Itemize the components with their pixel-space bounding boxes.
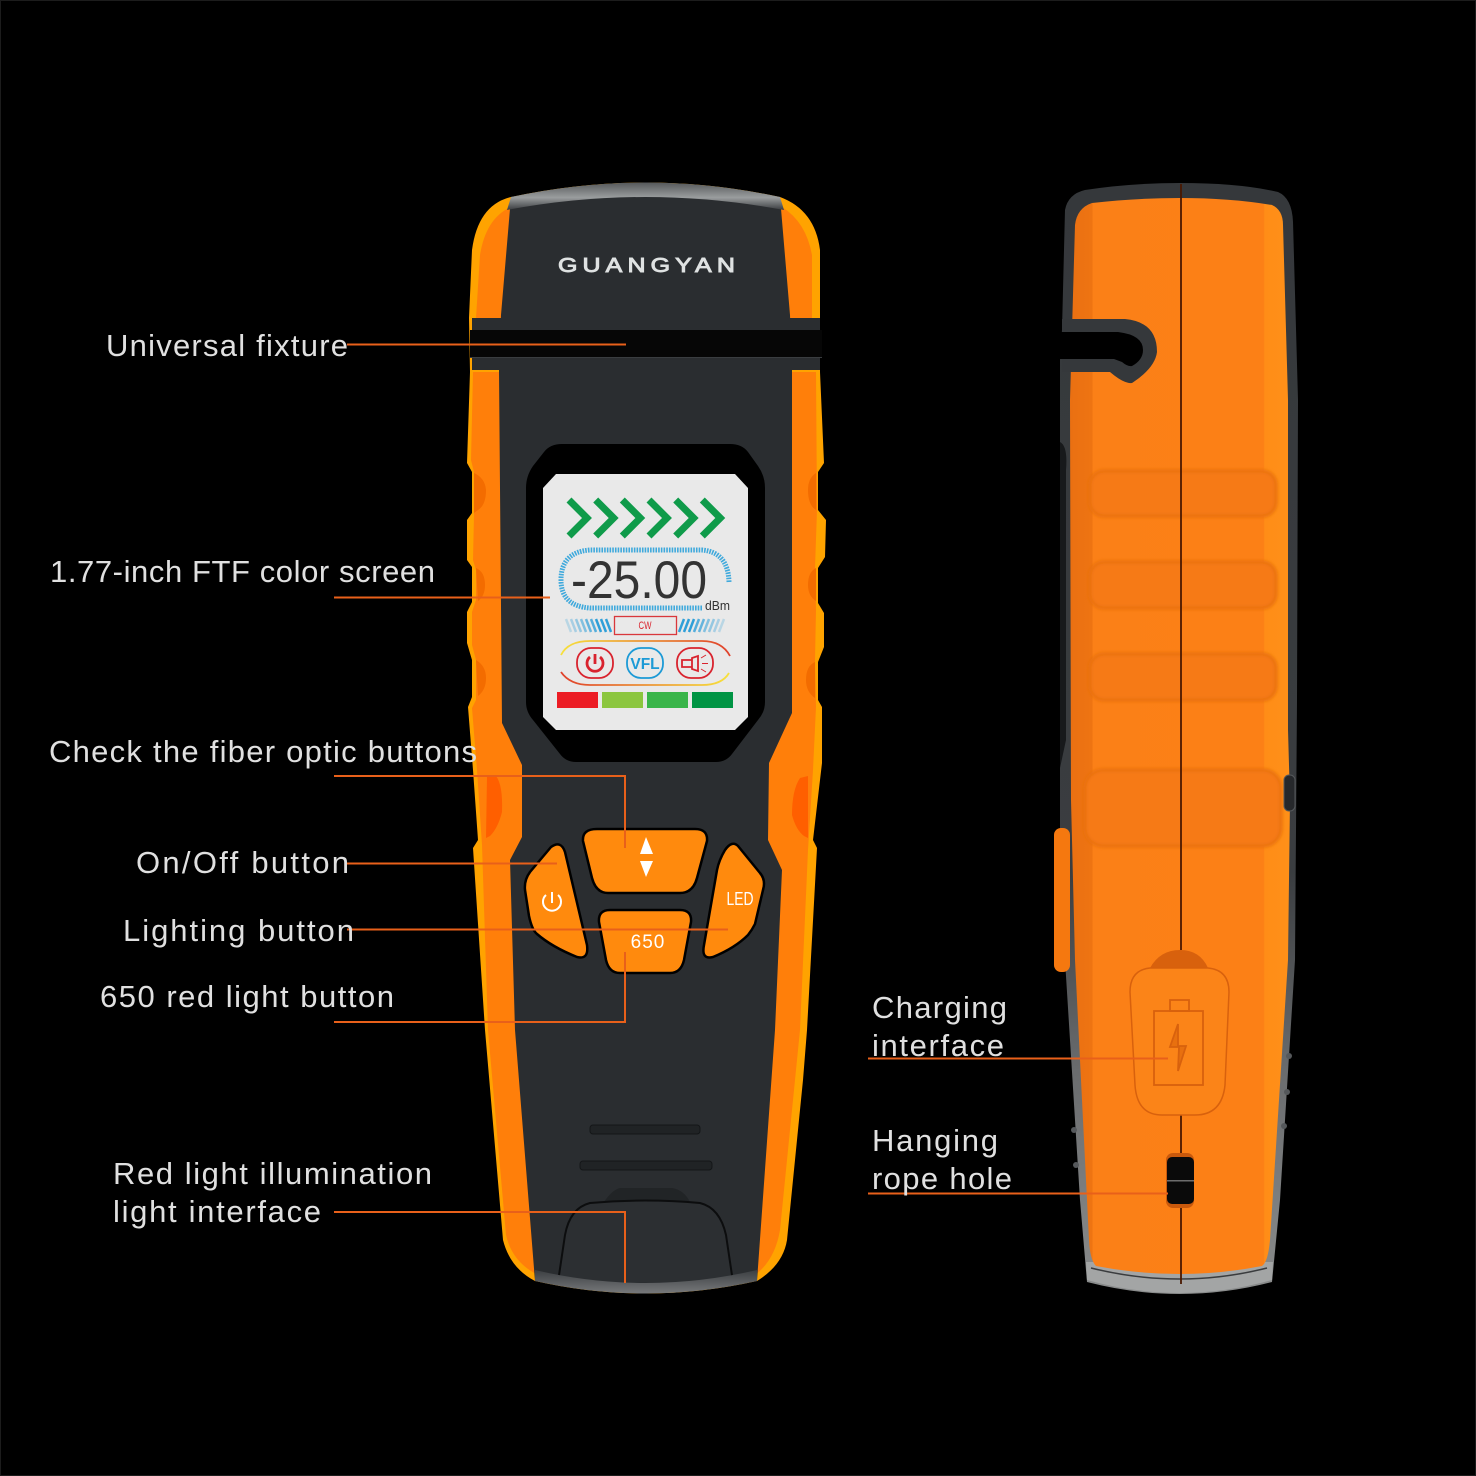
line: lighting	[347, 928, 728, 930]
red light port cover	[558, 1200, 733, 1282]
port cover shadow	[604, 1188, 690, 1202]
keypad	[525, 829, 764, 973]
line: 650	[334, 952, 625, 1022]
power button	[525, 844, 587, 958]
signal bars	[557, 692, 733, 708]
label: charging	[872, 990, 1007, 1063]
left dark side strip	[1060, 442, 1066, 768]
front casing: outer yellow edge	[467, 182, 826, 1294]
side casing orange	[1070, 198, 1290, 1274]
CW box	[614, 616, 676, 634]
line: universal fixture	[347, 344, 626, 346]
line: rope hole	[868, 1192, 1168, 1194]
reading frame	[561, 550, 729, 608]
charging cover	[1130, 950, 1229, 1115]
screen bezel	[526, 444, 765, 762]
front casing: upper orange band	[476, 207, 812, 318]
label: rope hole: Hanging	[872, 1123, 998, 1158]
label: rope hole: rope hole	[872, 1161, 1012, 1196]
side grip niche right	[792, 776, 808, 838]
icon: VFL: VFL	[630, 656, 660, 673]
side button	[1054, 828, 1070, 972]
edge studs	[1071, 1053, 1292, 1168]
power reading: -25.00	[571, 551, 707, 610]
CW box: CW	[638, 620, 652, 632]
label: lighting: Lighting button	[123, 913, 354, 948]
label: fiber buttons: Check the fiber optic buttons	[49, 734, 477, 769]
label: charging: Charging	[872, 990, 1007, 1025]
rope hole	[1166, 1153, 1194, 1208]
side grip recess shades left	[474, 473, 486, 696]
line: charging	[868, 1058, 1168, 1060]
label: charging: interface	[872, 1028, 1004, 1063]
top grey band	[507, 182, 784, 210]
650 button: 650	[631, 932, 665, 953]
base seam	[1091, 1268, 1267, 1279]
side casing grey base	[1086, 1262, 1273, 1293]
back ridges	[580, 1125, 712, 1170]
LCD background	[543, 474, 748, 730]
up/down button	[583, 829, 707, 893]
dark body	[499, 184, 792, 1290]
label: 650: 650 red light button	[100, 979, 394, 1014]
label: red light port: Red light illumination	[113, 1156, 432, 1191]
status arc top	[561, 641, 730, 656]
mode hatch left	[566, 619, 611, 632]
label: red light port: light interface	[113, 1194, 321, 1229]
bottom grey band	[535, 1270, 757, 1294]
side grip niche left	[486, 776, 502, 838]
device: side view	[1050, 183, 1298, 1294]
LED button: LED	[726, 889, 754, 909]
line: screen	[334, 596, 550, 598]
right side knob	[1284, 775, 1295, 811]
line: red light port	[334, 1212, 625, 1283]
label: screen: 1.77-inch FTF color screen	[50, 554, 435, 589]
label: on/off: On/Off button	[136, 845, 349, 880]
signal chevrons	[569, 500, 720, 536]
LCD screen	[543, 474, 748, 730]
icon: LCD power	[577, 648, 613, 678]
device: front view	[467, 182, 826, 1294]
grip ridges	[1085, 471, 1281, 846]
side casing shell	[1060, 183, 1298, 1294]
front casing: lower orange band	[471, 372, 817, 1275]
icon: LCD torch	[677, 648, 713, 678]
brand name: GUANGYAN	[558, 253, 735, 276]
line: fiber buttons	[334, 776, 625, 848]
hook notch opening	[1050, 332, 1143, 366]
hook notch frame	[1062, 319, 1157, 383]
icon: VFL	[627, 648, 663, 678]
icon: battery	[1154, 1000, 1203, 1085]
callout lines	[334, 344, 1168, 1283]
mode hatch right	[679, 619, 724, 632]
650 button	[599, 910, 691, 973]
center seam	[1180, 184, 1182, 1284]
line: on/off	[347, 862, 557, 864]
label: universal fixture: Universal fixture	[106, 328, 348, 363]
universal fixture slot	[470, 318, 822, 370]
side grip recess shades right	[806, 473, 816, 698]
LED button	[703, 844, 764, 958]
unit: dBm	[705, 598, 730, 613]
label: rope hole	[872, 1123, 1012, 1196]
status arc bottom	[561, 672, 729, 685]
label: red light port	[113, 1156, 432, 1229]
